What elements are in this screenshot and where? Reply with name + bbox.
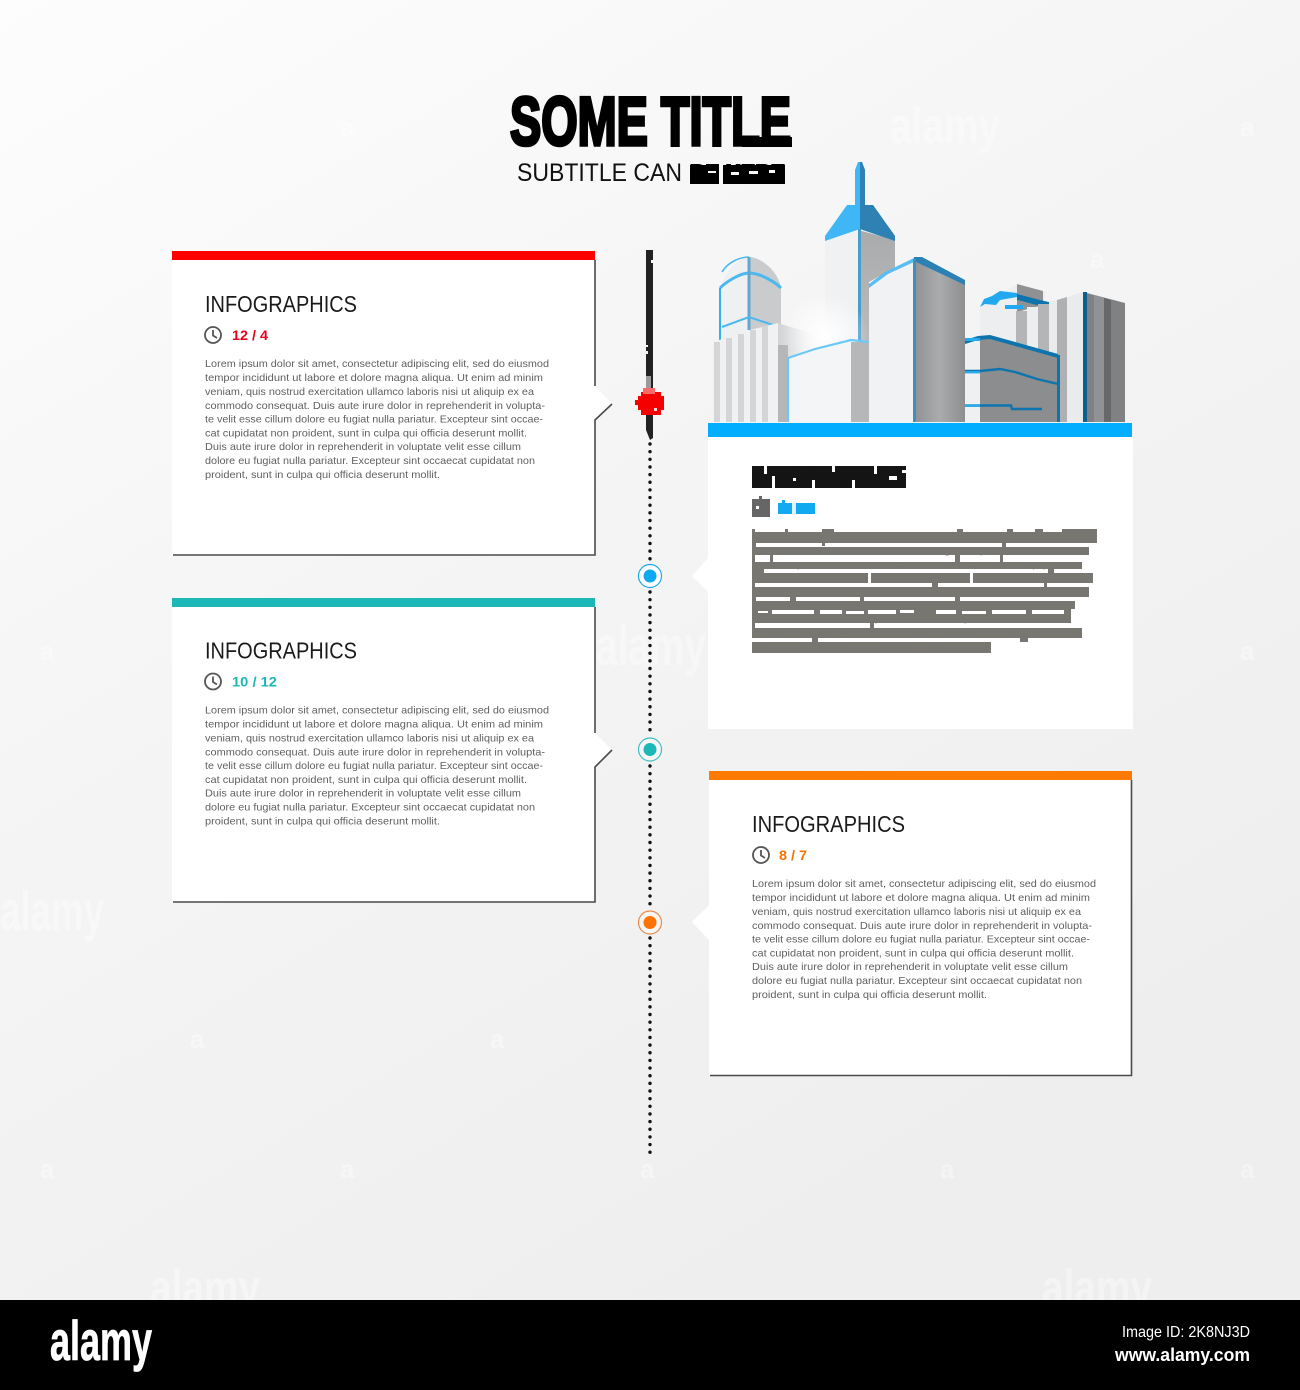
body text: dolore eu fugiat nulla pariatur. Excepteur sint occaecat cupidatat non [205,802,535,814]
icon: clock [205,327,221,343]
body text: dolore eu fugiat nulla pariatur. Excepteur sint occaecat cupidatat non [205,455,535,467]
watermarks: alamy [596,614,706,677]
body text: proident, sunt in culpa qui officia deserunt mollit. [205,816,440,828]
body text (obscured): cat cupidatat non proident, sunt in culpa qui officia deserunt mollit. [753,603,1071,610]
node: teal [638,738,662,761]
watermarks: a [490,1024,505,1054]
watermarks: a [40,636,55,666]
subtitle: SUBTITLE CAN [517,159,682,187]
subtitle: BE HERE [690,159,785,189]
timeline [635,250,664,1153]
building: striped right tower [1016,292,1125,422]
body text: tempor incididunt ut labore et dolore magna aliqua. Ut enim ad minim [205,718,543,730]
body text [752,878,1096,1001]
body text: dolore eu fugiat nulla pariatur. Excepteur sint occaecat cupidatat non [752,975,1082,987]
watermarks: a [340,112,355,142]
watermarks: a [1090,244,1105,274]
date: 8 / 7 [779,847,807,863]
icon: clock (obscured) [752,496,770,517]
watermarks: a [940,1154,955,1184]
body text: commodo consequat. Duis aute irure dolor in reprehenderit in volupta- [205,746,546,758]
icon: clock [753,847,769,863]
website: www.alamy.com [1114,1345,1250,1365]
watermarks: a [340,1154,355,1184]
building: striped left block [713,323,817,422]
body text (obscured): dolore eu fugiat nulla pariatur. Excepteur sint occaecat cupidatat non [753,631,1078,638]
footer logo: alamy [50,1309,152,1372]
panel border [173,607,612,902]
red top bar [172,251,595,260]
body text [205,358,549,481]
date: 10 / 12 [232,674,277,690]
body text (obscured): commodo consequat. Duis aute irure dolor in reprehenderit in volupta- [753,576,1090,583]
body text (obscured): Duis aute irure dolor in reprehenderit in voluptate velit esse cillum [753,617,1067,624]
panel card [172,598,612,902]
body text: Duis aute irure dolor in reprehenderit in voluptate velit esse cillum [205,441,521,453]
illustration: city skyline [713,162,1125,422]
node: red [635,376,664,415]
heading: INFOGRAPHICS [205,638,357,664]
date (obscured) [778,500,815,516]
watermarks: alamy [150,1260,260,1316]
body text: proident, sunt in culpa qui officia deserunt mollit. [752,989,987,1001]
watermarks: a [1240,636,1255,666]
body text: commodo consequat. Duis aute irure dolor in reprehenderit in volupta- [205,400,546,412]
teal top bar [172,598,595,607]
watermarks: a [1240,1154,1255,1184]
panel: blue highlighted card [692,423,1133,729]
node: orange [638,911,662,934]
body text: te velit esse cillum dolore eu fugiat nulla pariatur. Excepteur sint occae- [205,760,544,772]
body text: cat cupidatat non proident, sunt in culpa qui officia deserunt mollit. [205,428,527,440]
blue top band [708,423,1132,437]
footer bar [0,1300,1300,1390]
watermarks: alamy [0,879,104,942]
building: low white block [788,340,869,422]
image id: Image ID: 2K8NJ3D [1122,1324,1250,1341]
body text: te velit esse cillum dolore eu fugiat nulla pariatur. Excepteur sint occae- [205,414,544,426]
date: 12 / 4 [232,327,268,343]
panel card [692,437,1133,729]
body text: veniam, quis nostrud exercitation ullamco laboris nisi ut aliquip ex ea [205,386,534,398]
body text (obscured): veniam, quis nostrud exercitation ullamco laboris nisi ut aliquip ex ea [753,563,1078,570]
body text: tempor incididunt ut labore et dolore magna aliqua. Ut enim ad minim [752,892,1090,904]
body text (obscured) [752,529,1097,653]
building: central spire tower [825,162,895,422]
heading: INFOGRAPHICS [752,811,905,837]
orange top bar [709,771,1132,780]
building: right sloped block [965,335,1060,422]
body text (obscured): tempor incididunt ut labore et dolore magna aliqua. Ut enim ad minim [753,549,1085,556]
body text (obscured): proident, sunt in culpa qui officia deserunt mollit. [753,646,987,653]
panel border [173,260,612,555]
building: central front block [869,257,965,422]
body text: veniam, quis nostrud exercitation ullamco laboris nisi ut aliquip ex ea [205,732,534,744]
body text [205,704,549,828]
body text: Lorem ipsum dolor sit amet, consectetur adipiscing elit, sed do eiusmod [205,704,549,716]
obscured text connecting pixels [752,529,1097,642]
solid timeline segment [646,250,653,440]
title [510,83,792,160]
panel: lower right (orange) [692,771,1132,1076]
body text: proident, sunt in culpa qui officia deserunt mollit. [205,469,440,481]
panel border [710,780,1132,1076]
watermarks: a [640,1154,655,1184]
date (obscured): 6 [778,502,793,516]
heading (obscured): INFOGRAPHICS [752,467,906,490]
glow behind skyline [783,293,867,377]
watermarks: a [1240,112,1255,142]
watermarks: a [190,1024,205,1054]
body text: Duis aute irure dolor in reprehenderit in voluptate velit esse cillum [752,961,1068,973]
body text (obscured): Lorem ipsum dolor sit amet, consectetur adipiscing elit, sed do eiusmod [753,536,1093,543]
icon: clock [205,674,221,690]
obscured text white flecks [758,573,1064,614]
panel card [692,771,1132,1076]
body text (obscured): te velit esse cillum dolore eu fugiat nulla pariatur. Excepteur sint occae- [753,590,1086,597]
timeline notches [646,260,653,354]
body text: cat cupidatat non proident, sunt in culpa qui officia deserunt mollit. [752,948,1074,960]
watermarks: a [40,1154,55,1184]
body text: Lorem ipsum dolor sit amet, consectetur adipiscing elit, sed do eiusmod [752,878,1096,890]
body text: veniam, quis nostrud exercitation ullamco laboris nisi ut aliquip ex ea [752,906,1081,918]
watermarks: alamy [1042,1260,1152,1316]
heading: INFOGRAPHICS [205,291,357,317]
body text: te velit esse cillum dolore eu fugiat nulla pariatur. Excepteur sint occae- [752,934,1091,946]
body text: Duis aute irure dolor in reprehenderit in voluptate velit esse cillum [205,788,521,800]
body text: commodo consequat. Duis aute irure dolor in reprehenderit in volupta- [752,920,1093,932]
body text: Lorem ipsum dolor sit amet, consectetur adipiscing elit, sed do eiusmod [205,358,549,370]
watermarks: alamy [890,98,1000,154]
panel card [172,251,612,555]
node: blue [638,564,662,588]
panel: top left (red) [172,251,612,555]
panel: middle left (teal) [172,598,612,902]
body text: cat cupidatat non proident, sunt in culpa qui officia deserunt mollit. [205,774,527,786]
subtitle [517,159,785,189]
title: SOME TITLE [510,83,791,160]
building: rear right [980,284,1053,422]
dotted timeline segments [648,444,652,1153]
body text: tempor incididunt ut labore et dolore magna aliqua. Ut enim ad minim [205,372,543,384]
building: left dome tower [720,257,781,345]
